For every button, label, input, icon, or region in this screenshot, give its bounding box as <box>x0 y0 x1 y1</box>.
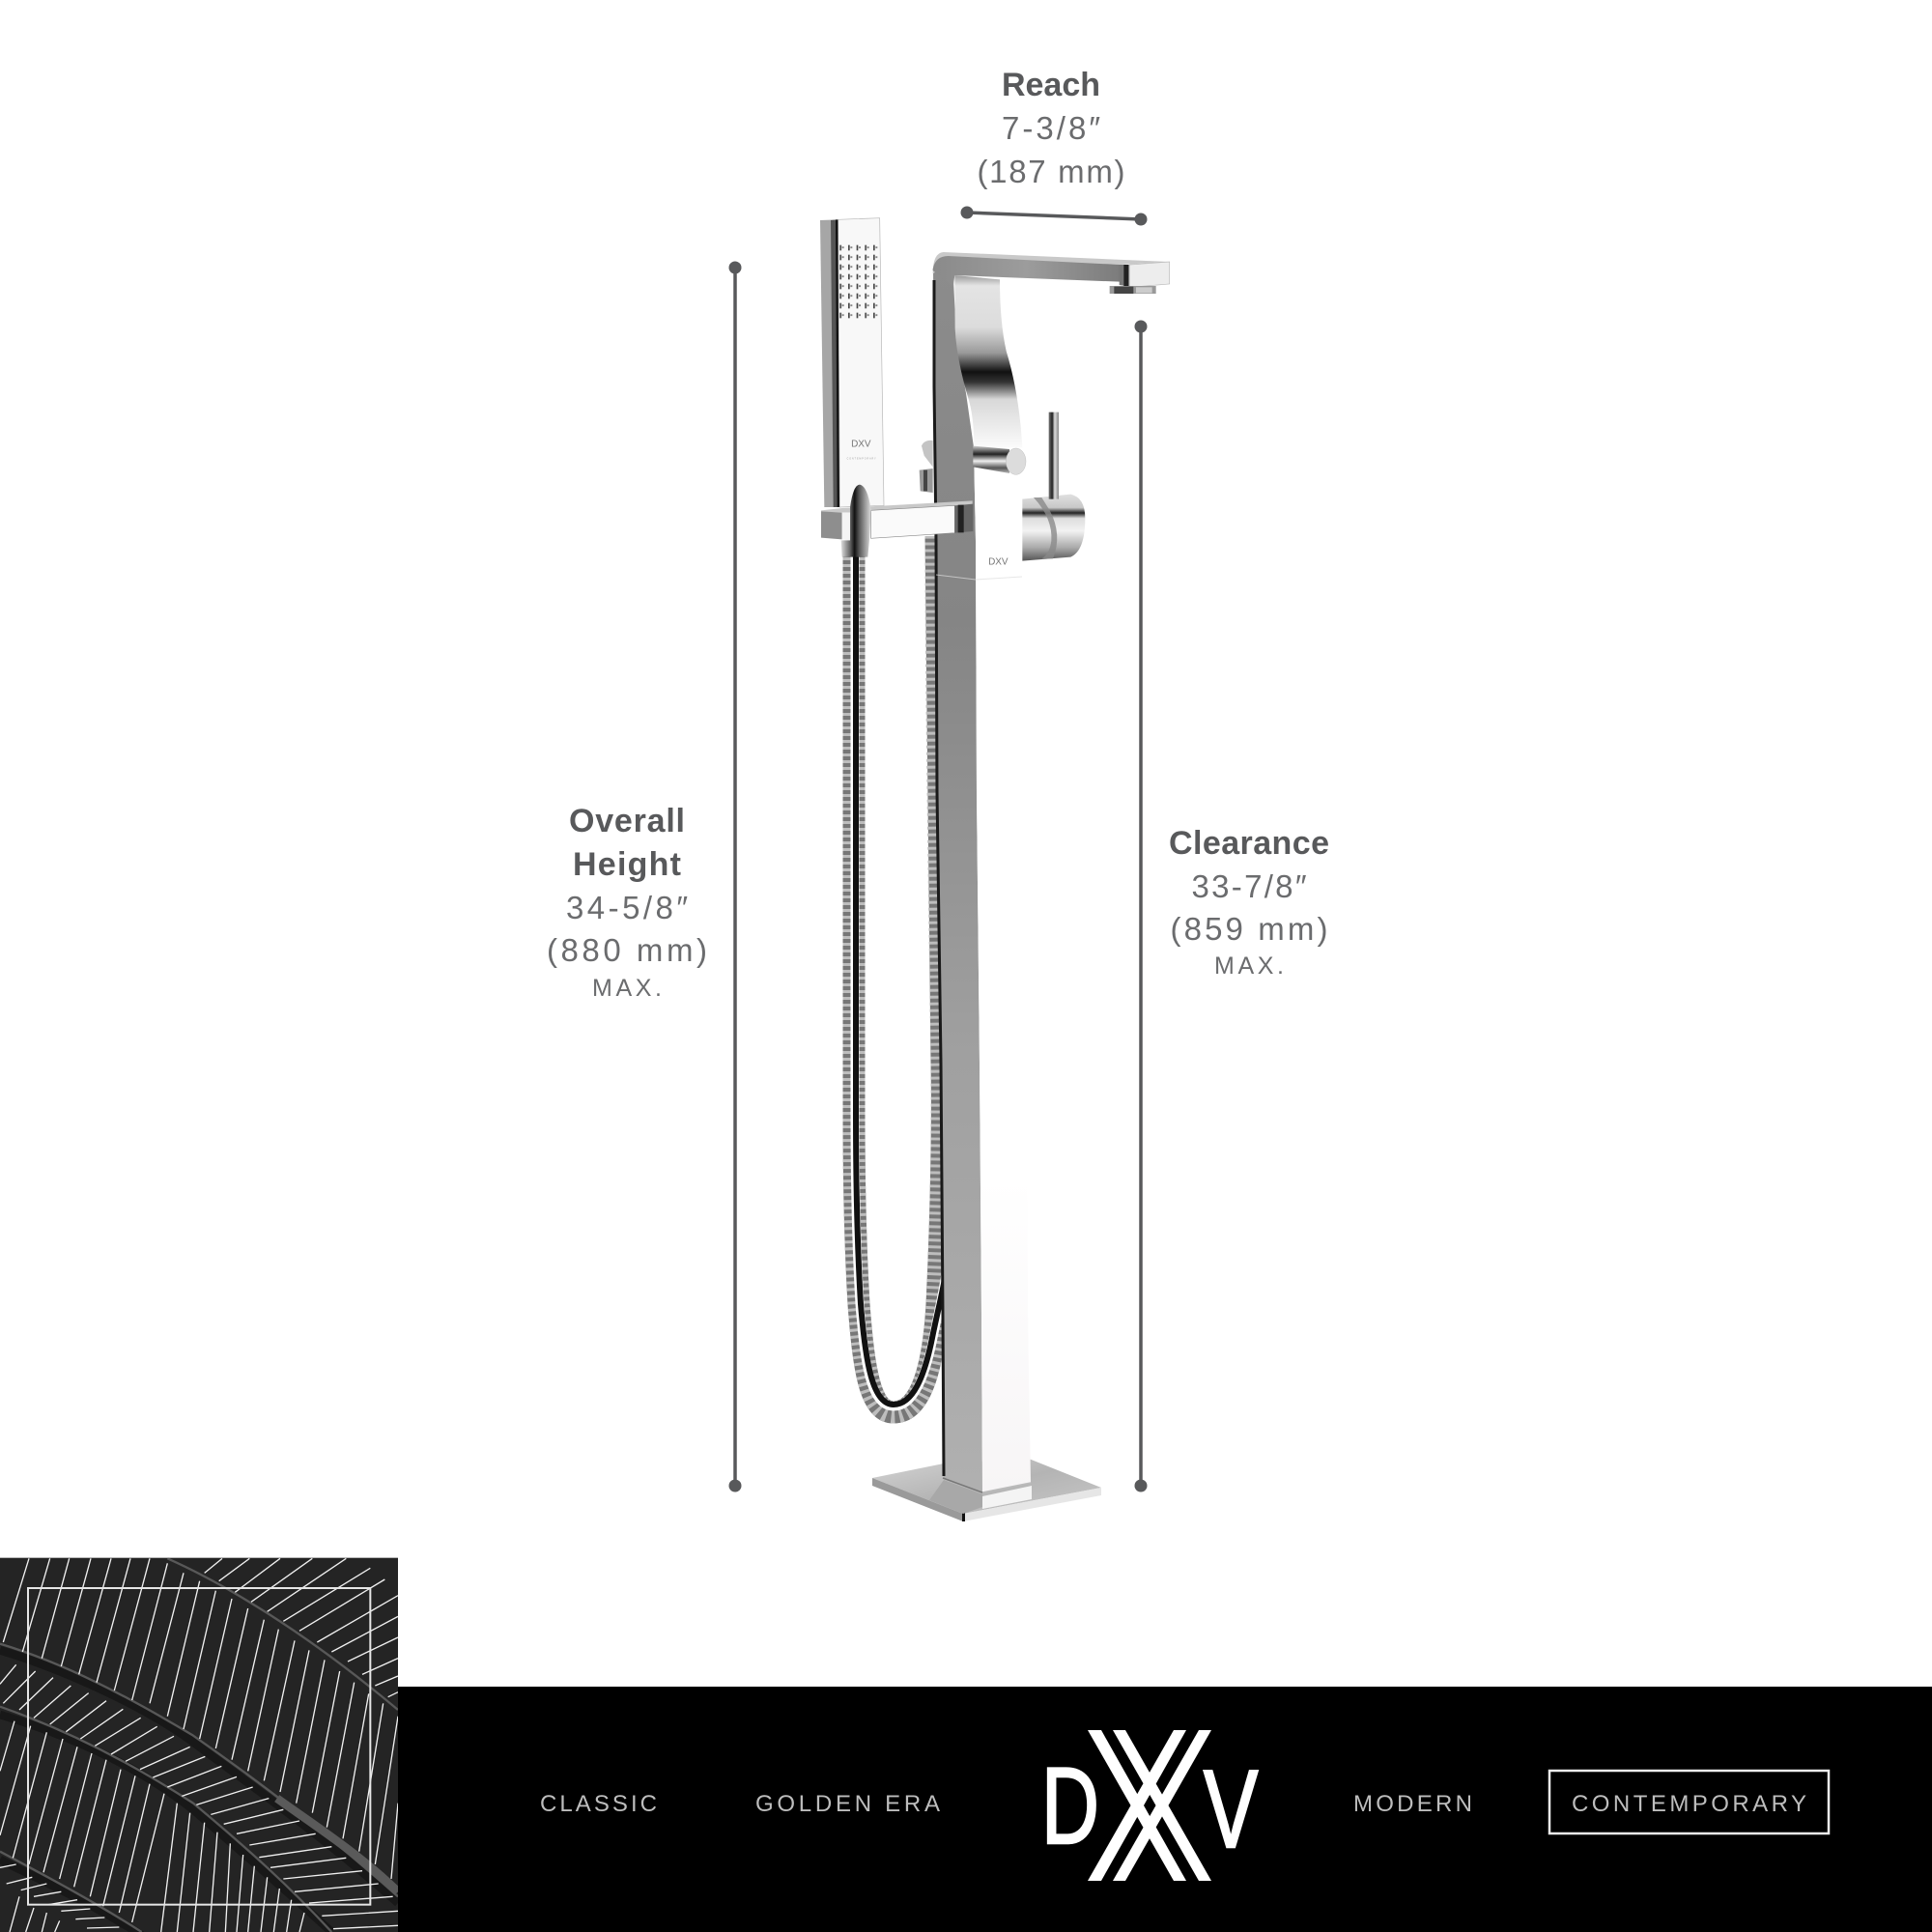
column logo: DXV <box>988 556 1009 567</box>
nav label: golden era: GOLDEN ERA <box>755 1791 940 1817</box>
footer band <box>398 1687 1932 1932</box>
label: clearance: (859 mm) <box>1171 911 1327 947</box>
label: clearance: MAX. <box>1214 952 1284 980</box>
hand shower: DXV <box>851 440 871 450</box>
illustration: freestanding tub filler faucet <box>820 218 1170 1521</box>
label: reach: (187 mm) <box>978 154 1124 189</box>
hand shower <box>820 218 884 507</box>
label: overall height <box>547 803 707 1002</box>
label: clearance <box>1169 825 1329 980</box>
mixer handle body <box>1022 412 1085 561</box>
dimension line: clearance <box>1134 321 1148 1492</box>
label: overall height: MAX. <box>592 975 662 1002</box>
photo frame <box>28 1588 370 1905</box>
hose bracket <box>920 440 933 493</box>
hand shower: CONTEMPORARY <box>847 457 876 460</box>
nav item: contemporary (selected): CONTEMPORARY <box>1572 1791 1806 1817</box>
hose <box>854 536 949 1412</box>
logo: DXV: V <box>1204 1748 1258 1871</box>
base plate <box>872 1459 1101 1521</box>
nav label: classic: CLASSIC <box>540 1791 657 1817</box>
ribs <box>0 1558 398 1932</box>
dimension line: reach <box>960 207 1148 226</box>
label: overall height: Overall <box>569 803 685 839</box>
label: overall height: (880 mm) <box>547 932 707 968</box>
nav item: contemporary (selected) <box>1549 1771 1829 1833</box>
photo panel: architectural ribs <box>0 1558 398 1932</box>
slats <box>205 1558 398 1697</box>
logo: DXV <box>1041 1730 1258 1881</box>
label: overall height: 34-5/8″ <box>566 890 688 925</box>
label: clearance: 33-7/8″ <box>1192 868 1307 904</box>
label: overall height: Height <box>573 846 681 883</box>
ribbon front <box>954 275 1022 447</box>
label: reach: Reach <box>1002 67 1100 103</box>
upper faucet detail <box>820 218 1170 567</box>
logo: DXV: D <box>1041 1746 1099 1866</box>
dimension line: overall height <box>728 261 742 1492</box>
hand shower holder arm <box>821 485 973 557</box>
spout <box>933 252 1170 294</box>
label: clearance: Clearance <box>1169 825 1329 862</box>
column <box>933 269 1031 1492</box>
label: reach: 7-3/8″ <box>1002 110 1100 146</box>
nav label: modern: MODERN <box>1353 1791 1472 1817</box>
diverter knob <box>973 446 1026 474</box>
label: reach <box>978 67 1124 189</box>
